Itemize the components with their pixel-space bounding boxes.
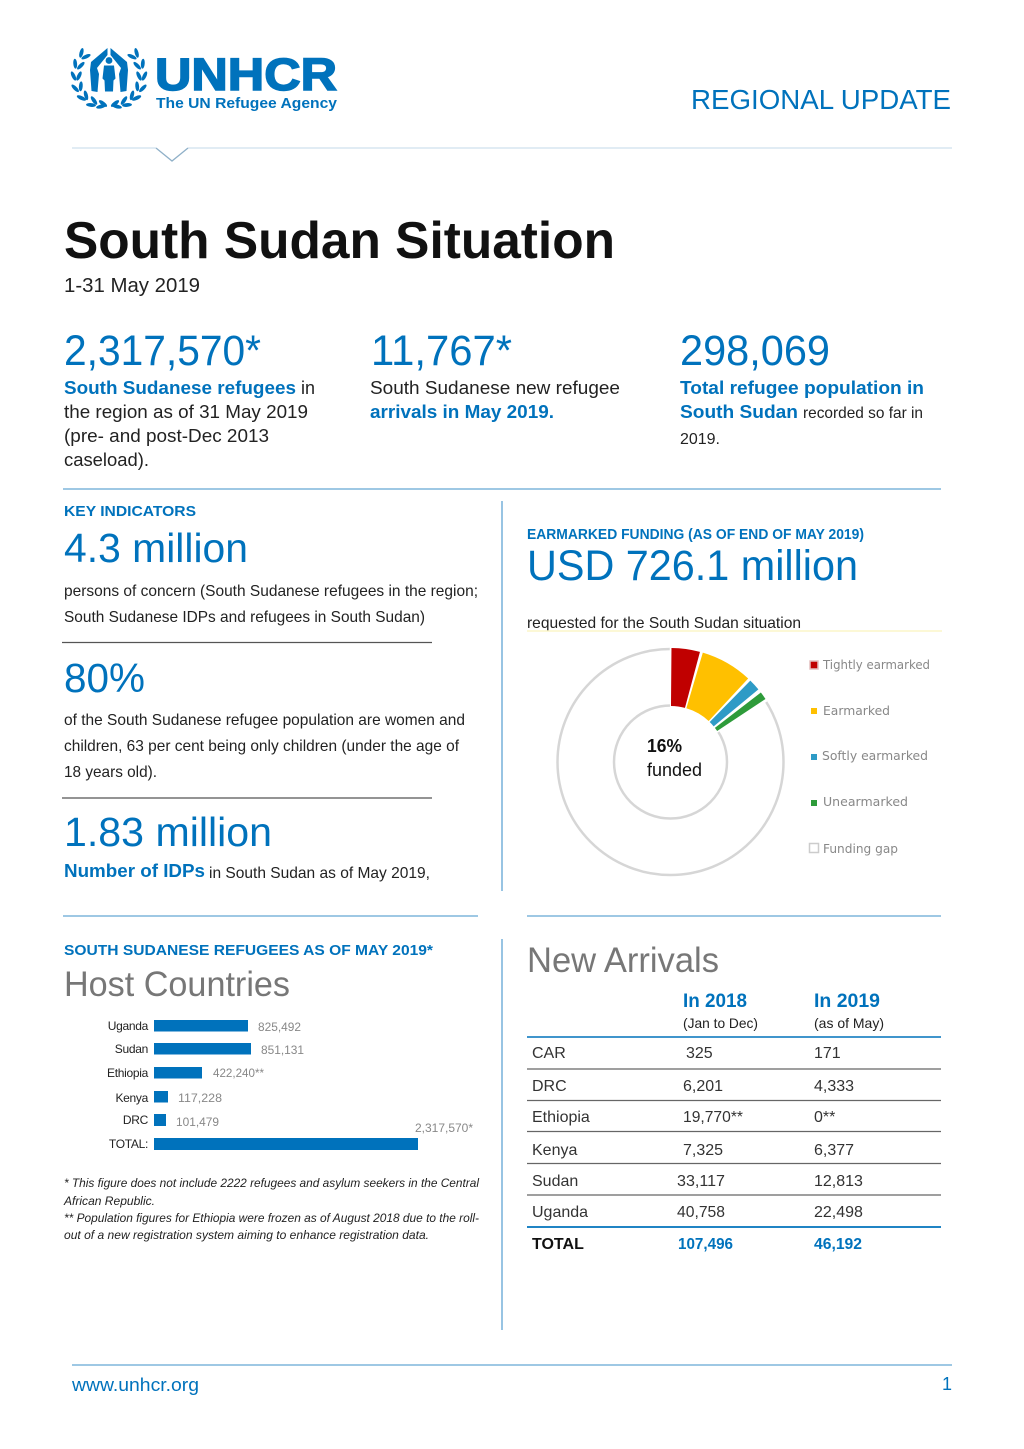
- bar chart: refugees by host country: 101,479: [176, 1115, 219, 1129]
- stat: total refugee population in South Sudan: 2019.: [680, 431, 720, 448]
- funding amount: USD 726.1 million: [527, 542, 858, 590]
- header logo: UNHCR: [70, 48, 338, 112]
- stat: refugees in the region: in: [301, 377, 315, 398]
- stat: new arrivals: [370, 327, 620, 422]
- stat: refugees in the region: caseload).: [64, 449, 149, 470]
- footnotes: [63, 1176, 479, 1242]
- stat: refugees in the region: (pre- and post-Dec 2013: [64, 425, 269, 446]
- chart legend: Tightly earmarked: [822, 657, 930, 672]
- table: new arrivals: TOTAL: [532, 1236, 584, 1253]
- bar chart: refugees by host country: Sudan: [115, 1042, 148, 1056]
- table: new arrivals: 6,201: [683, 1078, 723, 1095]
- bar chart: refugees by host country: Ethiopia: [107, 1066, 149, 1080]
- table: new arrivals: [527, 991, 941, 1253]
- stat: refugees in the region: South Sudanese refugees: [64, 377, 296, 398]
- icon: laurel and sheltering hands emblem: [70, 48, 148, 109]
- indicator: persons of concern: persons of concern (South Sudanese refugees in the region;: [64, 583, 478, 600]
- stat: refugees in the region: the region as of 31 May 2019: [64, 401, 308, 422]
- logo tagline: The UN Refugee Agency: [156, 95, 338, 112]
- footnotes: African Republic.: [63, 1194, 155, 1208]
- stat: total refugee population in South Sudan: South Sudan: [680, 401, 798, 422]
- divider: [63, 488, 941, 490]
- stat: total refugee population in South Sudan: 298,069: [680, 327, 830, 375]
- table: new arrivals: 46,192: [814, 1236, 862, 1253]
- stat: total refugee population in South Sudan: recorded so far in: [803, 405, 923, 422]
- stat: new arrivals: 11,767*: [371, 327, 512, 375]
- indicator: women and children: of the South Sudanese refugee population are women and: [64, 712, 465, 729]
- table: new arrivals: 33,117: [677, 1173, 725, 1190]
- indicator: IDPs: 1.83 million: [64, 809, 272, 855]
- table: new arrivals: 7,325: [683, 1142, 723, 1159]
- stat: total refugee population in South Sudan: Total refugee population in: [680, 377, 924, 398]
- table: new arrivals: 40,758: [677, 1204, 725, 1221]
- heading: new arrivals: New Arrivals: [527, 941, 719, 980]
- logo wordmark: UNHCR: [155, 49, 337, 100]
- donut centre label: 16%: [647, 736, 682, 756]
- table: new arrivals: 22,498: [814, 1204, 863, 1221]
- chart legend: Earmarked: [823, 703, 890, 718]
- bar chart: refugees by host country: 2,317,570*: [415, 1121, 473, 1135]
- stat: refugees in the region: 2,317,570*: [64, 327, 261, 375]
- heading: regional update: REGIONAL UPDATE: [691, 84, 951, 115]
- chart legend: Funding gap: [823, 841, 898, 856]
- stat: new arrivals: arrivals in May 2019.: [370, 401, 554, 422]
- panel: earmarked funding: [527, 527, 942, 875]
- column divider lower: [501, 939, 503, 1330]
- bar chart: refugees by host country: TOTAL:: [109, 1137, 148, 1151]
- indicator: persons of concern: [64, 525, 478, 626]
- table: new arrivals: 6,377: [814, 1142, 854, 1159]
- column divider upper: [501, 501, 503, 891]
- bar chart: refugees by host country: [107, 1019, 473, 1151]
- table: new arrivals: 325: [686, 1045, 713, 1062]
- indicator: women and children: [64, 655, 465, 781]
- bar chart: refugees by host country: 117,228: [178, 1091, 222, 1105]
- table: new arrivals: 12,813: [814, 1173, 863, 1190]
- date: 1-31 May 2019: [64, 275, 200, 297]
- indicator: IDPs: in South Sudan as of May 2019,: [209, 865, 430, 882]
- indicator: women and children: 18 years old).: [64, 764, 157, 781]
- table: new arrivals: CAR: [532, 1045, 566, 1062]
- footnotes: out of a new registration system aiming to enhance registration data.: [64, 1228, 429, 1242]
- bar chart: refugees by host country: 422,240**: [213, 1066, 264, 1080]
- table header: (Jan to Dec): [683, 1015, 758, 1031]
- page number: 1: [942, 1374, 952, 1394]
- stat: refugees in the region: [64, 327, 315, 470]
- bar chart: refugees by host country: Uganda: [108, 1019, 149, 1033]
- title: South Sudan Situation: [64, 212, 615, 270]
- indicator: IDPs: [64, 809, 430, 882]
- bar chart: refugees by host country: 851,131: [261, 1043, 304, 1057]
- panel: new arrivals: [527, 941, 941, 1253]
- footer url: www.unhcr.org: [71, 1375, 199, 1395]
- panel: host countries: [63, 943, 479, 1242]
- header rule: [72, 147, 952, 149]
- table header: (as of May): [814, 1015, 884, 1031]
- heading: host countries: Host Countries: [64, 965, 290, 1004]
- table: new arrivals: 0**: [814, 1109, 835, 1126]
- indicator: persons of concern: 4.3 million: [64, 525, 248, 571]
- table: new arrivals: DRC: [532, 1078, 567, 1095]
- chart legend: [810, 657, 930, 856]
- table header: [683, 991, 884, 1031]
- indicator: women and children: 80%: [64, 655, 145, 701]
- footnotes: * This figure does not include 2222 refugees and asylum seekers in the Central: [64, 1176, 479, 1190]
- table header: In 2019: [814, 991, 880, 1012]
- footnotes: ** Population figures for Ethiopia were frozen as of August 2018 due to the roll-: [64, 1211, 479, 1225]
- table: new arrivals: Sudan: [532, 1173, 578, 1190]
- donut centre label: funded: [647, 760, 702, 780]
- stat: new arrivals: South Sudanese new refugee: [370, 377, 620, 398]
- chart legend: Unearmarked: [823, 794, 908, 809]
- table: new arrivals: 19,770**: [683, 1109, 743, 1126]
- table: new arrivals: Ethiopia: [532, 1109, 590, 1126]
- icon: chevron on header rule: [156, 148, 188, 161]
- indicator: persons of concern: South Sudanese IDPs and refugees in South Sudan): [64, 609, 425, 626]
- bar chart: refugees by host country: Kenya: [115, 1091, 149, 1105]
- table: new arrivals: 171: [814, 1045, 841, 1062]
- donut chart: funding: [558, 649, 784, 875]
- stat: total refugee population in South Sudan: [680, 327, 924, 448]
- bar chart: refugees by host country: DRC: [123, 1113, 149, 1127]
- table: new arrivals: Kenya: [532, 1142, 577, 1159]
- bar chart: refugees by host country: 825,492: [258, 1020, 301, 1034]
- heading: key indicators: KEY INDICATORS: [64, 503, 196, 520]
- heading: refugees as of May 2019: SOUTH SUDANESE REFUGEES AS OF MAY 2019*: [64, 943, 433, 959]
- heading: earmarked funding: EARMARKED FUNDING (AS OF END OF MAY 2019): [527, 527, 864, 543]
- indicator: women and children: children, 63 per cent being only children (under the age of: [64, 738, 460, 755]
- footer: [71, 1365, 952, 1395]
- donut centre label: [647, 736, 702, 780]
- table: new arrivals: Uganda: [532, 1204, 588, 1221]
- funding caption: requested for the South Sudan situation: [527, 615, 801, 632]
- table header: In 2018: [683, 991, 747, 1012]
- chart legend: Softly earmarked: [822, 748, 928, 763]
- panel: key indicators: [62, 503, 478, 882]
- table: new arrivals: 107,496: [678, 1236, 733, 1253]
- indicator: IDPs: Number of IDPs: [64, 860, 205, 881]
- section rules: [63, 915, 941, 917]
- table: new arrivals: 4,333: [814, 1078, 854, 1095]
